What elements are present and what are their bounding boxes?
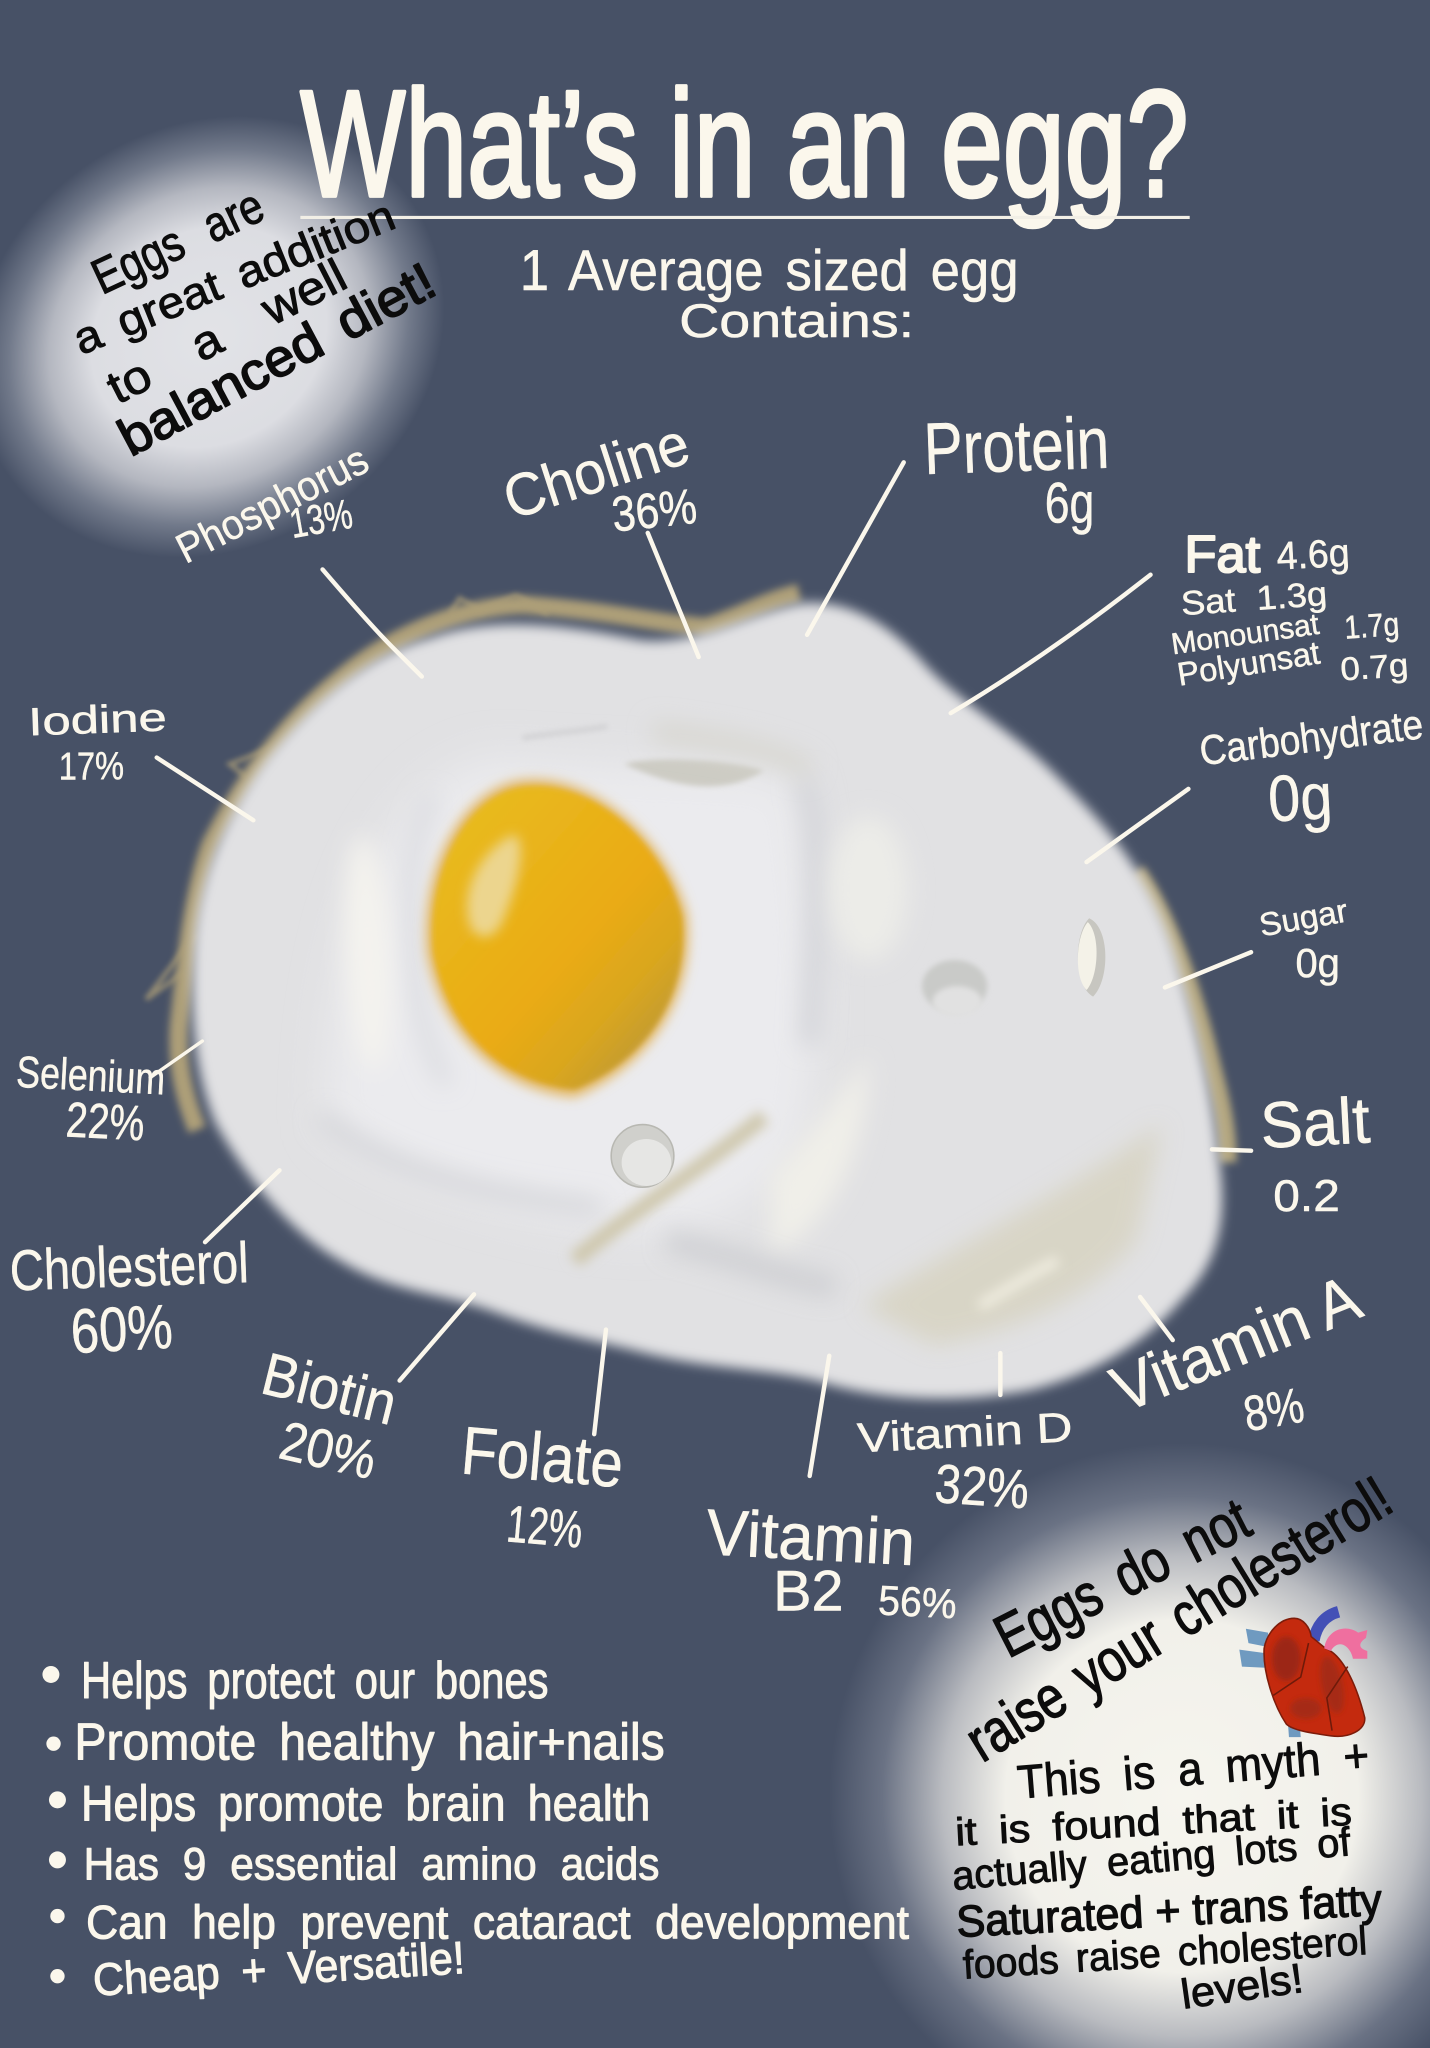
callout: eggs do not raise cholesterol: Eggs do not — [984, 1485, 1261, 1670]
label: salt: Salt — [1258, 1083, 1372, 1162]
label: cholesterol — [9, 1170, 279, 1367]
label: biotin: Biotin — [255, 1340, 403, 1438]
callout: balanced diet: a great addition — [66, 191, 402, 365]
label: selenium — [15, 1041, 202, 1151]
label: cholesterol: Cholesterol — [9, 1231, 250, 1303]
callout: eggs do not raise cholesterol: actually eating lots of — [950, 1818, 1353, 1899]
label: cholesterol: 60% — [69, 1292, 174, 1367]
label: folate: Folate — [458, 1414, 626, 1502]
label: iodine: Iodine — [28, 697, 167, 744]
egg white — [192, 603, 1222, 1399]
label: choline — [495, 410, 699, 657]
egg crispy rim — [146, 593, 1228, 1162]
label: carbohydrate: 0g — [1266, 759, 1334, 836]
label: fat: Sat 1.3g — [1180, 575, 1328, 623]
label: selenium: Selenium — [15, 1048, 166, 1104]
label: vitamin B2: 56% — [877, 1576, 958, 1627]
callout: eggs do not raise cholesterol: it is found that it is — [954, 1791, 1353, 1855]
bullet 5: Can help prevent cataract development — [86, 1895, 909, 1948]
callout: balanced diet: to a well — [98, 248, 355, 414]
label: vitamin D — [856, 1353, 1074, 1521]
callout: eggs do not raise cholesterol: foods raise cholesterol — [962, 1917, 1368, 1988]
label: folate — [458, 1330, 626, 1560]
callout: eggs do not raise cholesterol — [950, 1463, 1403, 2018]
label: vitamin B2: B2 — [773, 1559, 844, 1623]
label: folate: 12% — [504, 1495, 585, 1560]
label: selenium: 22% — [65, 1091, 146, 1151]
bullet 3: Helps promote brain health — [81, 1776, 650, 1832]
label: protein: Protein — [922, 403, 1110, 490]
bullet 4: Has 9 essential amino acids — [84, 1839, 659, 1890]
label: fat — [951, 526, 1409, 713]
label: sugar: 0g — [1295, 940, 1340, 986]
label: vitamin B2: Vitamin — [704, 1495, 917, 1579]
egg white shading — [320, 726, 1162, 1345]
label: fat: Fat — [1184, 526, 1261, 584]
callout: balanced diet: Eggs are — [83, 177, 272, 305]
title underline — [300, 216, 1190, 219]
label: fat: 0.7g — [1339, 646, 1409, 687]
glow panel: top left — [0, 78, 496, 601]
callout: balanced diet: balanced diet! — [109, 252, 445, 468]
label: protein — [807, 403, 1110, 635]
label: salt: 0.2 — [1273, 1172, 1340, 1221]
glow panel: bottom right — [823, 1437, 1430, 2048]
label: phosphorus — [168, 436, 422, 677]
label: iodine — [28, 697, 253, 820]
label: biotin — [255, 1294, 474, 1491]
callout: balanced diet — [66, 177, 445, 468]
label: fat: Monounsat — [1169, 608, 1322, 661]
yolk highlight — [467, 835, 521, 937]
subtitle — [520, 239, 1019, 347]
label: choline: Choline — [495, 410, 697, 532]
label: sugar — [1165, 891, 1350, 987]
label: vitamin A: Vitamin A — [1101, 1261, 1371, 1426]
fried egg illustration — [146, 593, 1228, 1399]
label: carbohydrate — [1087, 700, 1426, 862]
egg holes — [611, 918, 1105, 1187]
label: fat: 4.6g — [1275, 532, 1351, 578]
label: iodine: 17% — [59, 746, 124, 789]
label: fat: Polyunsat — [1175, 634, 1322, 693]
subtitle: Contains: — [679, 294, 914, 347]
label: fat: 1.7g — [1343, 605, 1400, 646]
callout: eggs do not raise cholesterol: levels! — [1178, 1954, 1306, 2018]
label: protein: 6g — [1045, 471, 1094, 535]
label: vitamin A: 8% — [1239, 1377, 1308, 1442]
label: vitamin D: Vitamin D — [856, 1403, 1074, 1461]
subtitle: 1 Average sized egg — [520, 239, 1019, 303]
label: biotin: 20% — [274, 1409, 382, 1491]
bullet 1: Helps protect our bones — [81, 1652, 548, 1710]
label: vitamin B2 — [704, 1356, 958, 1627]
icon: heart — [1239, 1612, 1367, 1737]
bullet 2: Promote healthy hair+nails — [74, 1713, 665, 1771]
label: sugar: Sugar — [1256, 891, 1350, 943]
bullet list: egg benefits — [42, 1652, 909, 2006]
label: vitamin D: 32% — [933, 1452, 1031, 1521]
label: phosphorus: 13% — [286, 490, 356, 547]
bullet 6: Cheap + Versatile! — [92, 1932, 466, 2006]
label: salt — [1212, 1083, 1372, 1221]
label: choline: 36% — [609, 478, 699, 543]
callout: eggs do not raise cholesterol: Saturated + trans fatty — [955, 1876, 1384, 1947]
yolk — [426, 779, 688, 1097]
callout: eggs do not raise cholesterol: This is a myth + — [1015, 1728, 1371, 1809]
label: phosphorus: Phosphorus — [168, 436, 376, 572]
